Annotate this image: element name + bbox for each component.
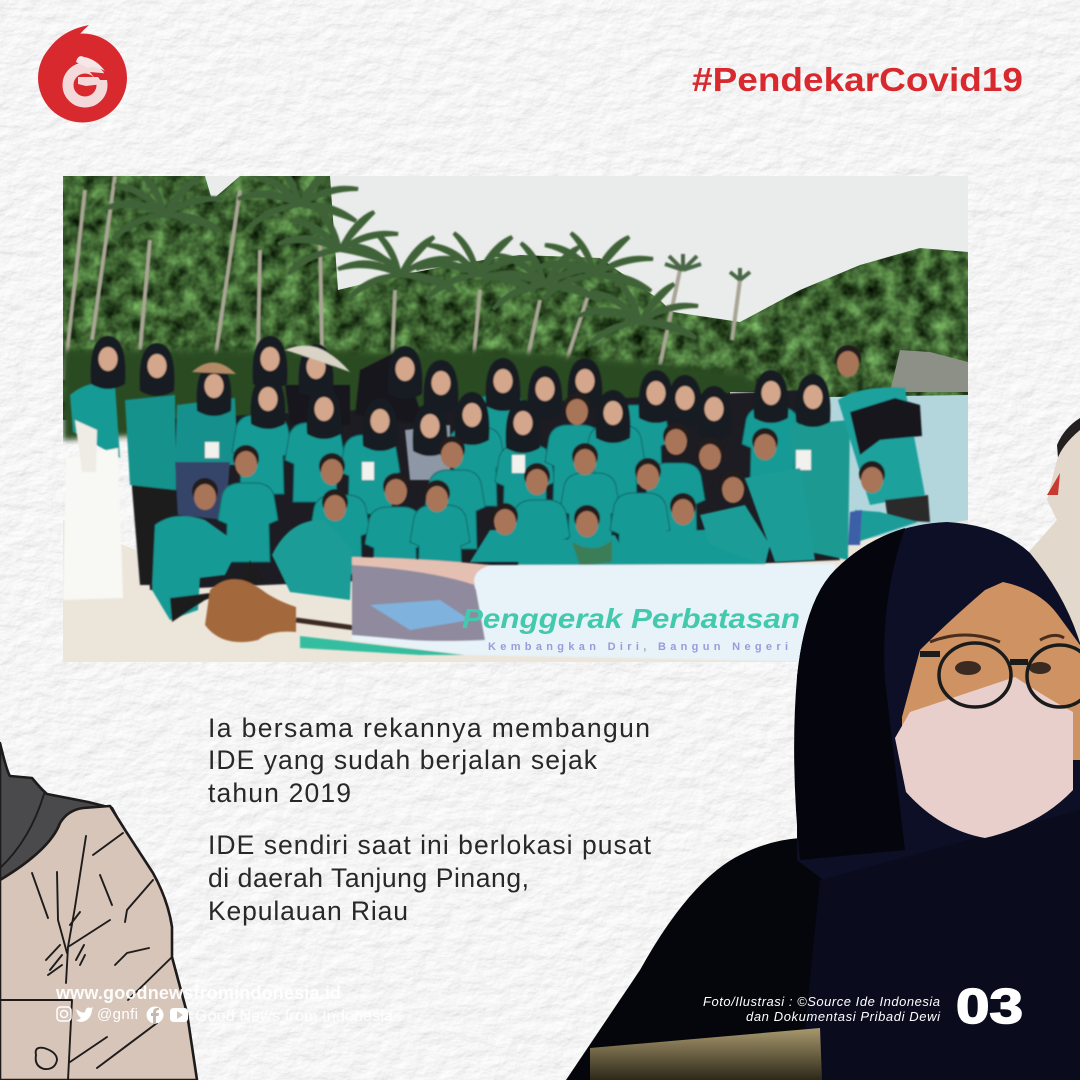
footer: website and social media bbox=[55, 983, 393, 1025]
face bbox=[902, 582, 1080, 760]
middle row bbox=[204, 384, 812, 516]
photo: group on a beach holding a banner bbox=[63, 163, 968, 662]
icon: instagram bbox=[57, 1007, 71, 1021]
body bbox=[566, 760, 1080, 1080]
sand bbox=[63, 520, 968, 662]
glasses bbox=[920, 643, 1080, 707]
logo: red number six with garuda bbox=[38, 25, 127, 122]
hijab bbox=[797, 522, 1080, 1000]
icon: twitter bbox=[76, 1007, 93, 1022]
photo credit bbox=[703, 994, 941, 1024]
rocks bbox=[890, 350, 968, 392]
icon: facebook bbox=[146, 1006, 164, 1024]
photo: woman in dark hijab and mask bbox=[566, 522, 1080, 1080]
text block: first paragraph bbox=[208, 713, 650, 808]
photo credit: dan Dokumentasi Pribadi Dewi bbox=[746, 1009, 941, 1024]
back row bbox=[70, 336, 930, 585]
foreground object bbox=[590, 1028, 822, 1080]
text block: first paragraph: tahun 2019 bbox=[208, 778, 351, 808]
sky bbox=[206, 176, 968, 322]
text block: second paragraph: di daerah Tanjung Pinang, bbox=[208, 863, 529, 893]
tree mass bbox=[63, 176, 669, 420]
text block: first paragraph: IDE yang sudah berjalan sejak bbox=[208, 745, 598, 775]
bushes bbox=[63, 350, 780, 440]
sea bbox=[829, 395, 968, 540]
woman in white skirt bbox=[63, 448, 123, 600]
illustration: partial figure, upper right bbox=[1028, 418, 1080, 800]
text block: first paragraph: Ia bersama rekannya membangun bbox=[208, 713, 650, 743]
group of people bbox=[63, 336, 930, 662]
page number: 03 bbox=[956, 980, 1023, 1034]
footer: website and social media: @gnfi bbox=[97, 1006, 138, 1023]
hill bbox=[672, 248, 968, 397]
text block: second paragraph: Kepulauan Riau bbox=[208, 896, 408, 926]
footer: website and social media: Good News from Indonesia bbox=[195, 1008, 393, 1025]
eyes bbox=[955, 661, 981, 675]
mask bbox=[895, 677, 1073, 838]
text block: second paragraph bbox=[208, 830, 652, 926]
footer: website and social media: www.goodnewsfromindonesia.id bbox=[55, 983, 341, 1003]
guitar bbox=[204, 578, 353, 644]
text block: second paragraph: IDE sendiri saat ini berlokasi pusat bbox=[208, 830, 652, 860]
illustration: figure in beige coat, lower left bbox=[0, 743, 197, 1080]
photo credit: Foto/Ilustrasi : ©Source Ide Indonesia bbox=[703, 994, 940, 1009]
front rows bbox=[152, 423, 918, 622]
banner bbox=[300, 557, 835, 662]
icon: youtube bbox=[170, 1008, 188, 1022]
hashtag heading: #PendekarCovid19 bbox=[692, 61, 1023, 98]
photo: group on a beach holding a banner: Kembangkan Diri, Bangun Negeri bbox=[488, 641, 788, 653]
banner text: Penggerak Perbatasan bbox=[462, 603, 800, 634]
dark gaps behind group bbox=[140, 390, 840, 590]
palms bbox=[64, 163, 750, 380]
